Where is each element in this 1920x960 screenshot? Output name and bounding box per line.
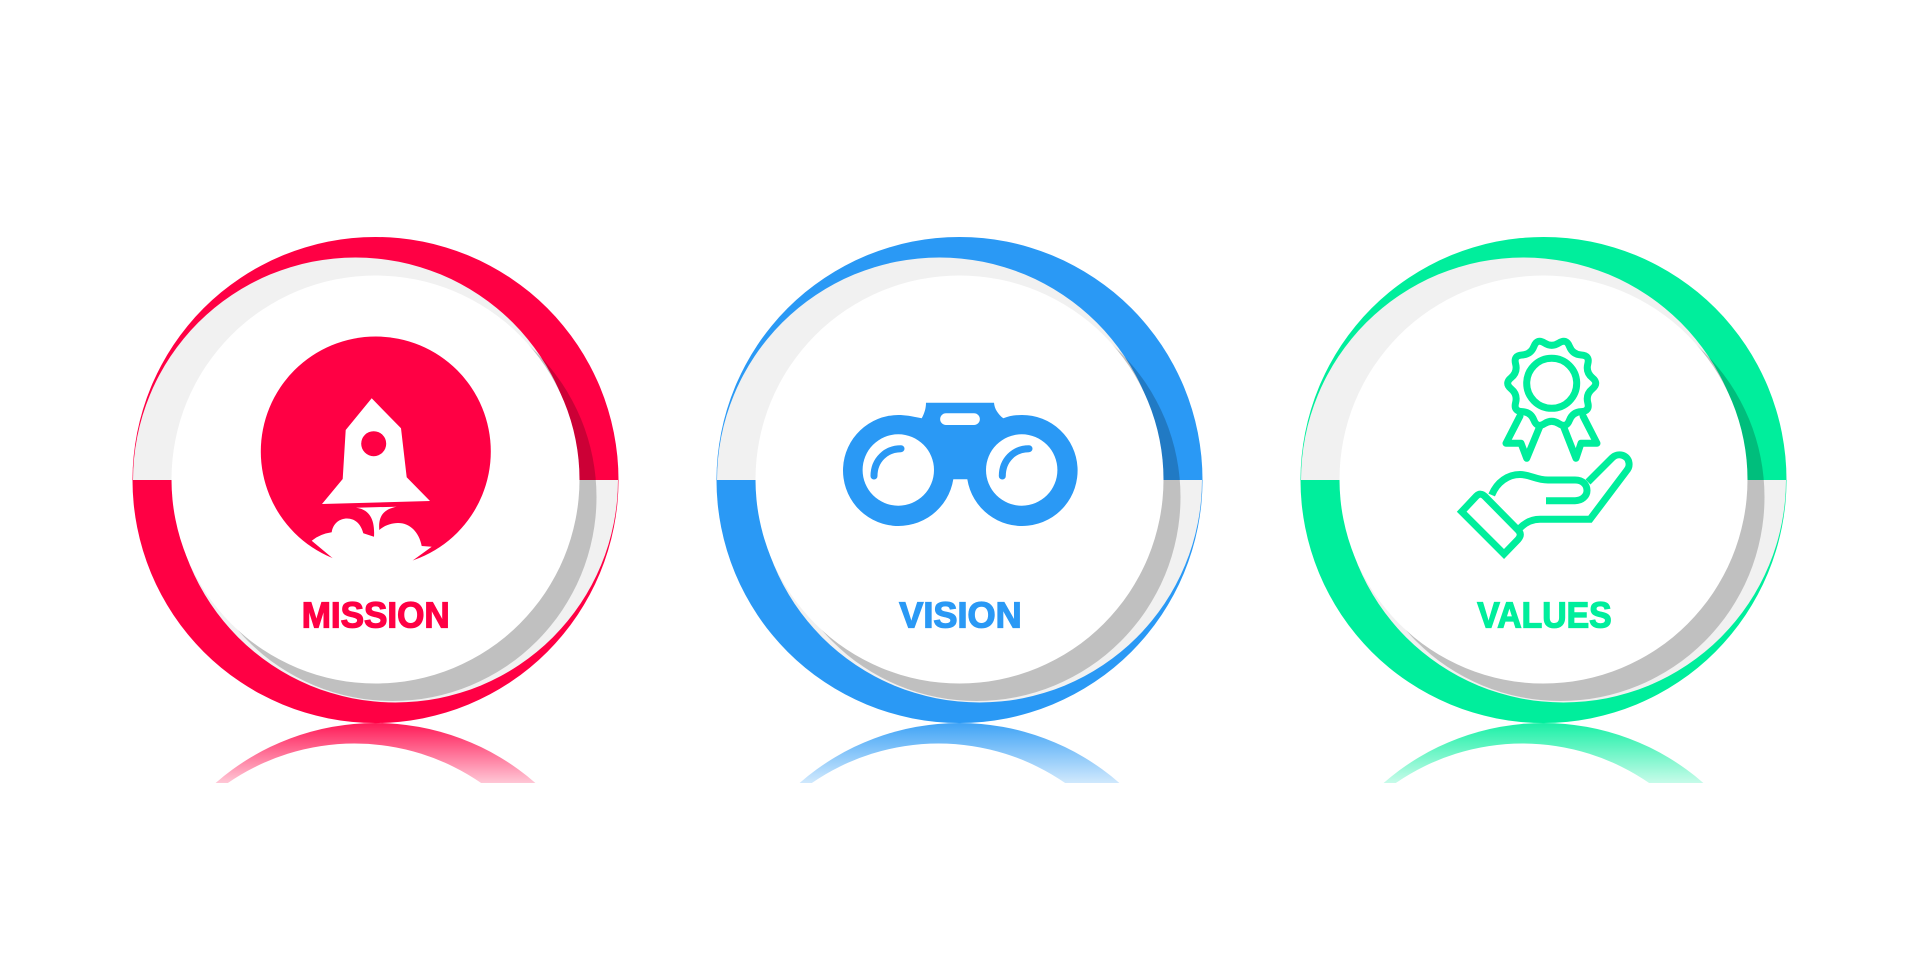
icon: rocket [261,336,491,590]
mission label: MISSION [302,594,450,635]
icon: binoculars [843,403,1078,526]
mission ring [132,237,618,723]
panel: values [1300,237,1786,784]
values reflection [1384,723,1703,784]
panel: mission [132,237,618,784]
panel: vision [716,237,1202,784]
vision ring [716,237,1202,723]
mission reflection [216,723,535,784]
vision label: VISION [899,594,1022,635]
vision reflection [800,723,1119,784]
icon: award in hand [1462,341,1629,554]
values ring [1300,237,1786,723]
values label: VALUES [1477,594,1612,635]
